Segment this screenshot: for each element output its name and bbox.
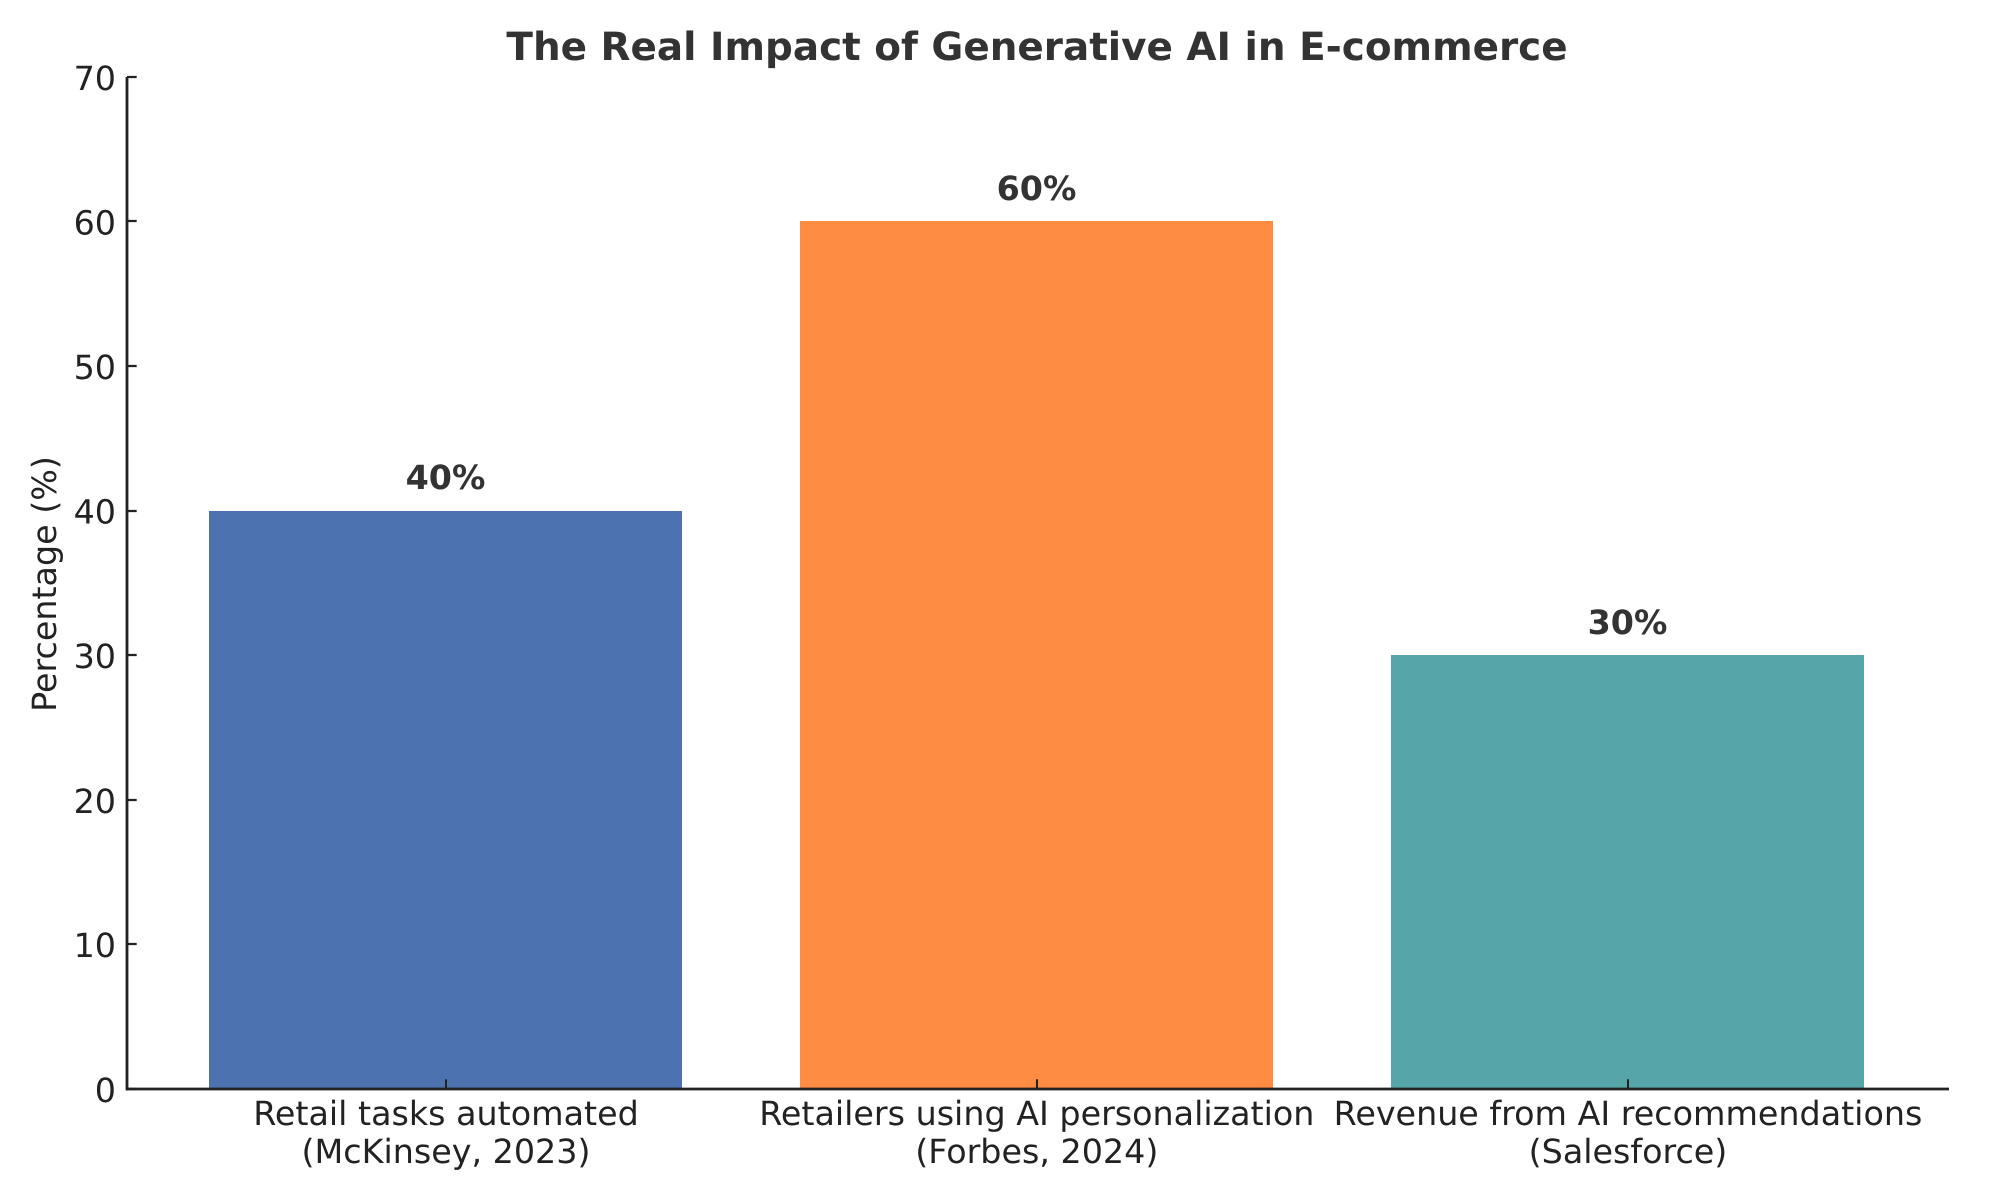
label: revenue from AI recommendations bbox=[1334, 1094, 1922, 1171]
label: retail tasks automated: Retail tasks automated bbox=[253, 1094, 639, 1133]
label: revenue from AI recommendations: Revenue from AI recommendations bbox=[1334, 1094, 1922, 1133]
axes lines and ticks bbox=[126, 77, 1949, 1090]
y axis tick labels: 10 bbox=[74, 926, 116, 965]
bar: retail tasks automated bbox=[209, 511, 682, 1089]
label: retail tasks automated: (McKinsey, 2023) bbox=[302, 1132, 590, 1171]
y axis tick labels: 60 bbox=[74, 203, 116, 242]
label: retailers using AI personalization: Retailers using AI personalization bbox=[759, 1094, 1314, 1133]
y axis tick labels: 30 bbox=[74, 637, 116, 676]
bar: retailers using AI personalization bbox=[800, 221, 1273, 1089]
y axis tick labels: 70 bbox=[74, 59, 116, 98]
y axis tick labels: 0 bbox=[95, 1071, 116, 1110]
value labels bbox=[406, 169, 1667, 642]
value: 40%: 40% bbox=[406, 458, 485, 497]
value: 60%: 60% bbox=[997, 169, 1076, 208]
y axis tick labels: 20 bbox=[74, 782, 116, 821]
label: retailers using AI personalization: (Forbes, 2024) bbox=[915, 1132, 1158, 1171]
bars bbox=[209, 221, 1864, 1089]
y axis tick labels: 50 bbox=[74, 348, 116, 387]
value: 30%: 30% bbox=[1588, 603, 1667, 642]
x axis category labels bbox=[253, 1094, 1922, 1171]
label: revenue from AI recommendations: (Salesforce) bbox=[1529, 1132, 1727, 1171]
label: retailers using AI personalization bbox=[759, 1094, 1314, 1171]
y axis title: Percentage (%) bbox=[25, 456, 64, 712]
title: The Real Impact of Generative AI in E-commerce bbox=[506, 25, 1568, 70]
y axis tick labels bbox=[74, 59, 116, 1110]
label: retail tasks automated bbox=[253, 1094, 639, 1171]
bar: revenue from AI recommendations bbox=[1391, 655, 1864, 1089]
y axis tick labels: 40 bbox=[74, 493, 116, 532]
